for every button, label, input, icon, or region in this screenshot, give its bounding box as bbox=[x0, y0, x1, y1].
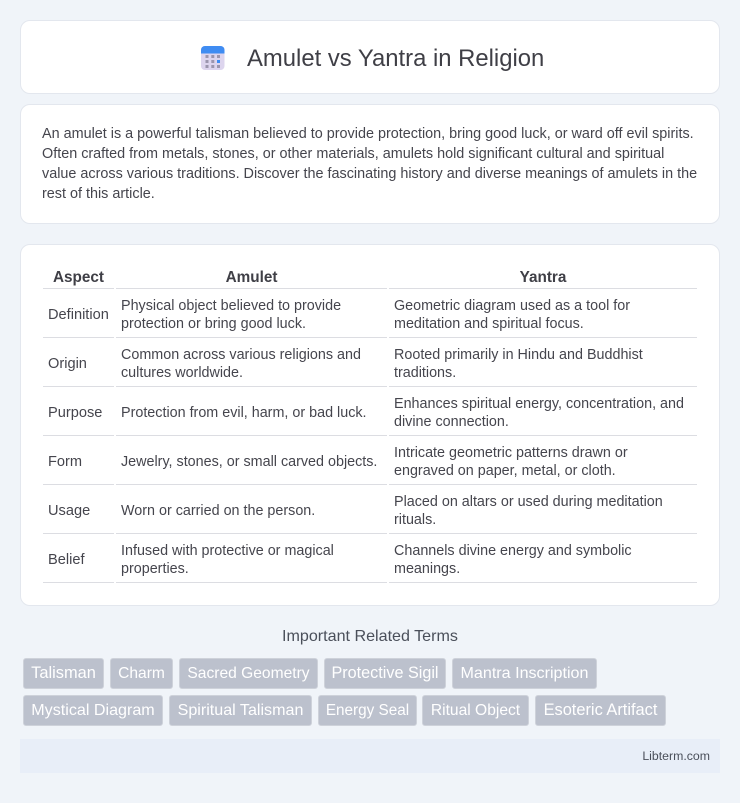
tag: Mystical Diagram bbox=[31, 701, 155, 719]
cell: Amulet origin: Common across various religions and bbox=[121, 347, 361, 363]
cell: Yantra origin: Rooted primarily in Hindu and Buddhist bbox=[394, 347, 643, 363]
cell: Yantra belief: Channels divine energy and symbolic bbox=[394, 543, 632, 559]
row label: Purpose: Purpose bbox=[48, 405, 102, 421]
tag bbox=[452, 658, 597, 689]
cell: Yantra usage bbox=[394, 494, 663, 528]
tag bbox=[318, 695, 417, 726]
row label: Origin: Origin bbox=[48, 356, 87, 372]
tag: Energy Seal bbox=[326, 702, 409, 719]
row label: Usage: Usage bbox=[48, 503, 90, 519]
footer bar bbox=[20, 739, 720, 773]
panel: header bbox=[20, 20, 720, 94]
row label: Definition: Definition bbox=[48, 307, 109, 323]
tag bbox=[179, 658, 318, 689]
cell: Yantra usage: rituals. bbox=[394, 512, 436, 528]
cell: Yantra origin bbox=[394, 347, 643, 381]
tag: Esoteric Artifact bbox=[544, 701, 657, 719]
cell: Yantra purpose: divine connection. bbox=[394, 414, 509, 430]
cell: Yantra definition: Geometric diagram used as a tool for bbox=[394, 298, 630, 314]
table header: Amulet: Amulet bbox=[226, 269, 277, 286]
footer credit: Libterm.com bbox=[642, 749, 710, 763]
cell: Amulet usage: Worn or carried on the person. bbox=[121, 503, 315, 519]
table header: Aspect: Aspect bbox=[53, 269, 104, 286]
cell: Yantra form: engraved on paper, metal, or cloth. bbox=[394, 463, 616, 479]
icon: calendar bbox=[201, 46, 224, 70]
cell: Yantra form bbox=[394, 445, 628, 479]
cell: Yantra form: Intricate geometric patterns drawn or bbox=[394, 445, 628, 461]
title: Amulet vs Yantra in Religion bbox=[247, 45, 544, 72]
text block: introduction: rest of this article. bbox=[42, 186, 155, 202]
tag: Talisman bbox=[31, 664, 96, 682]
cell: Amulet definition: Physical object believed to provide bbox=[121, 298, 341, 314]
tag: Spiritual Talisman bbox=[178, 701, 303, 719]
table header: Yantra: Yantra bbox=[520, 269, 566, 286]
row label: Belief: Belief bbox=[48, 552, 85, 568]
row label: Form: Form bbox=[48, 454, 82, 470]
cell: Amulet form: Jewelry, stones, or small carved objects. bbox=[121, 454, 377, 470]
cell: Amulet belief: properties. bbox=[121, 561, 189, 577]
cell: Amulet belief: Infused with protective or magical bbox=[121, 543, 334, 559]
tag bbox=[169, 695, 312, 726]
text block: introduction: An amulet is a powerful talisman believed to provide protection, bring good luck, or ward off evil spirits. bbox=[42, 126, 694, 142]
cell: Yantra belief: meanings. bbox=[394, 561, 460, 577]
cell: Yantra belief bbox=[394, 543, 632, 577]
tag: Protective Sigil bbox=[331, 664, 439, 682]
cell: Yantra definition bbox=[394, 298, 630, 332]
tag bbox=[324, 658, 446, 689]
panel: introduction bbox=[20, 104, 720, 224]
tag: Mantra Inscription bbox=[461, 664, 588, 682]
comparison table bbox=[43, 269, 697, 583]
cell: Amulet origin bbox=[121, 347, 361, 381]
cell: Yantra purpose bbox=[394, 396, 684, 430]
cell: Yantra usage: Placed on altars or used during meditation bbox=[394, 494, 663, 510]
cell: Yantra purpose: Enhances spiritual energy, concentration, and bbox=[394, 396, 684, 412]
tag bbox=[535, 695, 666, 726]
cell: Amulet definition bbox=[121, 298, 341, 332]
tag: Charm bbox=[118, 665, 165, 682]
cell: Amulet definition: protection or bring good luck. bbox=[121, 316, 306, 332]
text block: introduction bbox=[42, 126, 697, 202]
cell: Yantra definition: meditation and spiritual focus. bbox=[394, 316, 584, 332]
panel: comparison table bbox=[20, 244, 720, 606]
cell: Amulet belief bbox=[121, 543, 334, 577]
tag: Ritual Object bbox=[431, 702, 520, 719]
tag bbox=[23, 695, 163, 726]
tag bbox=[23, 658, 104, 689]
text block: introduction: value across various traditions. Discover the fascinating history and diverse meanings of amulets in the bbox=[42, 166, 697, 182]
tag bbox=[422, 695, 529, 726]
heading: related terms: Important Related Terms bbox=[282, 627, 458, 645]
cell: Amulet origin: cultures worldwide. bbox=[121, 365, 243, 381]
cell: Amulet purpose: Protection from evil, harm, or bad luck. bbox=[121, 405, 367, 421]
cell: Yantra origin: traditions. bbox=[394, 365, 456, 381]
tag bbox=[110, 658, 173, 689]
tags: related terms bbox=[23, 658, 666, 726]
text block: introduction: Often crafted from metals, stones, or other materials, amulets hold significant cultural and spiritual bbox=[42, 146, 664, 162]
tag: Sacred Geometry bbox=[187, 665, 310, 682]
